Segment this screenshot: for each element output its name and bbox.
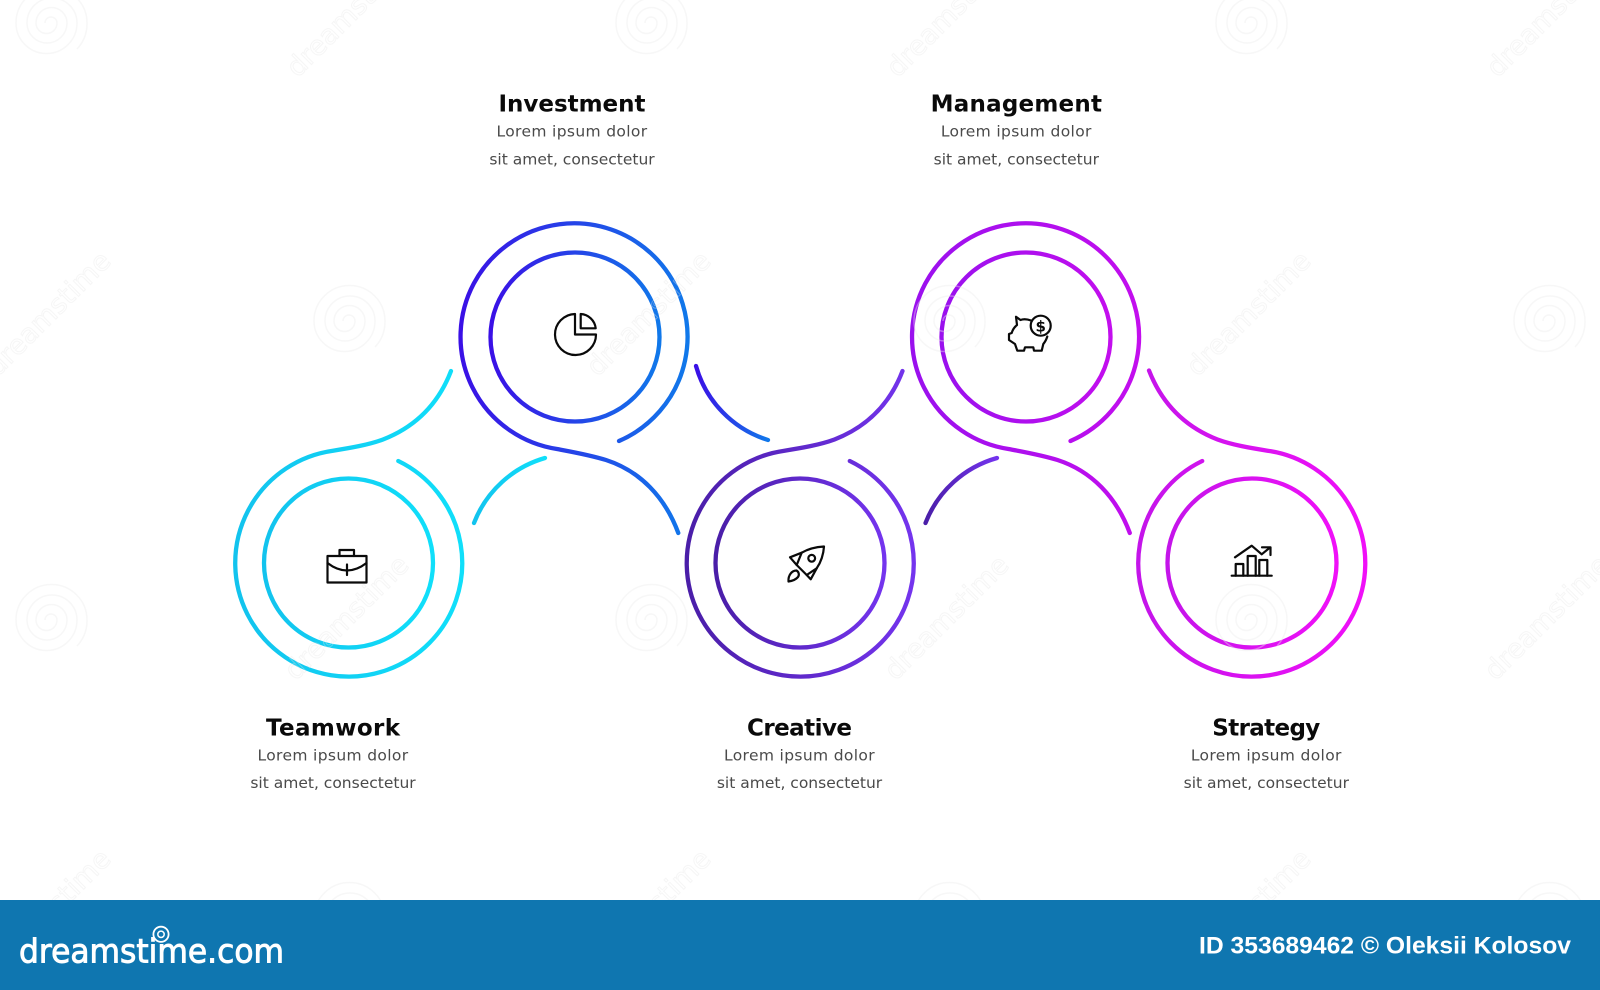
footer image id and author: ID 353689462 © Oleksii Kolosov <box>1199 932 1571 959</box>
strategy outer ring and connector <box>1138 370 1365 677</box>
text: Investment description: Lorem ipsum dolor <box>497 123 648 141</box>
step: Strategy <box>1138 370 1365 792</box>
investment outer ring and connector <box>461 223 688 533</box>
footer logo: dreamstime.com <box>19 932 284 971</box>
text: Strategy description: Lorem ipsum dolor <box>1191 746 1342 764</box>
heading: Creative: Creative <box>747 715 852 741</box>
text: Management description: Lorem ipsum dolor <box>941 123 1092 141</box>
infographic canvas: dreamstime <box>581 246 717 382</box>
text: Creative description: sit amet, consectetur <box>717 774 883 792</box>
management outer ring and connector <box>912 223 1139 533</box>
step: Creative <box>687 371 997 792</box>
step: Teamwork <box>235 371 545 792</box>
infographic canvas: dreamstime <box>879 550 1015 686</box>
teamwork to investment arc <box>474 458 545 523</box>
step: Management <box>912 92 1139 533</box>
teamwork inner ring <box>264 478 433 648</box>
text: Teamwork description: sit amet, consectetur <box>250 774 416 792</box>
investment to creative arc <box>696 366 768 440</box>
text: Strategy description: sit amet, consectetur <box>1184 774 1350 792</box>
icon: pie chart <box>555 314 596 355</box>
heading: Investment: Investment <box>498 92 646 118</box>
infographic canvas: dreamstime <box>581 844 717 980</box>
strategy inner ring <box>1168 478 1336 648</box>
text: Creative description: Lorem ipsum dolor <box>724 746 875 764</box>
icon: bar chart with arrow <box>1232 546 1272 576</box>
icon: briefcase <box>328 550 366 582</box>
text: Investment description: sit amet, consectetur <box>489 150 655 168</box>
infographic canvas: dreamstime <box>1181 246 1317 382</box>
icon: piggy bank: $ <box>1035 318 1046 336</box>
step: Investment <box>461 92 768 533</box>
creative outer ring and connector <box>687 371 914 677</box>
heading: Strategy: Strategy <box>1212 715 1320 741</box>
heading: Management: Management <box>931 92 1102 118</box>
icon: rocket <box>788 546 824 582</box>
teamwork outer ring and connector <box>235 371 462 677</box>
footer bar <box>0 900 1600 990</box>
infographic canvas: dreamstime <box>279 550 415 686</box>
management inner ring <box>942 252 1110 422</box>
infographic canvas: dreamstime <box>1181 844 1317 980</box>
creative to management arc <box>926 458 997 523</box>
text: Teamwork description: Lorem ipsum dolor <box>258 746 409 764</box>
icon: piggy bank <box>1009 316 1051 351</box>
creative inner ring <box>716 478 884 648</box>
investment inner ring <box>490 252 660 422</box>
heading: Teamwork: Teamwork <box>266 715 401 741</box>
text: Management description: sit amet, consectetur <box>934 150 1100 168</box>
